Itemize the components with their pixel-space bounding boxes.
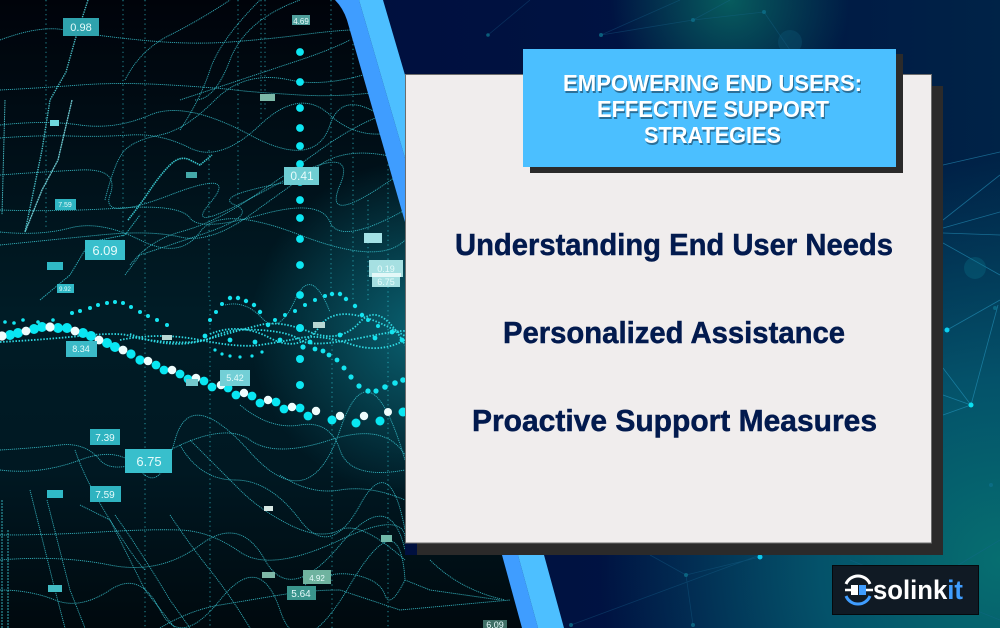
value labels: 6.75 bbox=[136, 454, 162, 469]
item: proactive support measures: Proactive Support Measures bbox=[472, 403, 877, 438]
title box bbox=[523, 49, 896, 167]
icon: plug logo mark bbox=[845, 576, 873, 604]
value labels: 6.75 bbox=[377, 277, 395, 287]
item: understanding end user needs: Understanding End User Needs bbox=[455, 227, 893, 262]
value labels: 0.41 bbox=[290, 169, 314, 183]
content panel bbox=[406, 74, 932, 543]
diagonal accent stripes bbox=[335, 0, 564, 628]
title box shadow bbox=[530, 54, 903, 173]
value labels: 0.19 bbox=[377, 264, 395, 274]
logo wordmark: solinkit bbox=[873, 575, 963, 605]
data visualization panel bbox=[0, 0, 540, 628]
main dot chain bbox=[5, 322, 408, 428]
logo badge bbox=[832, 566, 978, 614]
value labels: 5.42 bbox=[226, 373, 244, 383]
dense dotted wave band bbox=[0, 314, 405, 348]
arc dots bbox=[3, 292, 406, 394]
dotted vertical grid bbox=[46, 0, 388, 628]
value labels: 4.92 bbox=[309, 574, 325, 583]
title: EMPOWERING END USERS: bbox=[563, 70, 862, 96]
title: STRATEGIES bbox=[644, 122, 781, 148]
value labels: 5.64 bbox=[291, 589, 311, 600]
title: EFFECTIVE SUPPORT bbox=[597, 96, 830, 122]
value labels: 7.59 bbox=[95, 490, 115, 501]
value labels bbox=[47, 15, 507, 628]
value labels: 4.69 bbox=[293, 17, 309, 26]
value labels: 7.59 bbox=[58, 202, 72, 209]
title bbox=[563, 70, 862, 148]
value labels: 0.98 bbox=[70, 22, 92, 34]
value labels: 6.09 bbox=[92, 243, 118, 258]
value labels: 7.39 bbox=[95, 433, 115, 444]
item: personalized assistance: Personalized Assistance bbox=[503, 315, 845, 350]
thin wave lines bbox=[0, 0, 510, 628]
value labels: 8.34 bbox=[72, 344, 90, 354]
content panel shadow bbox=[417, 86, 943, 555]
vertical dot column bbox=[296, 16, 304, 389]
value labels: 9.92 bbox=[59, 287, 71, 293]
